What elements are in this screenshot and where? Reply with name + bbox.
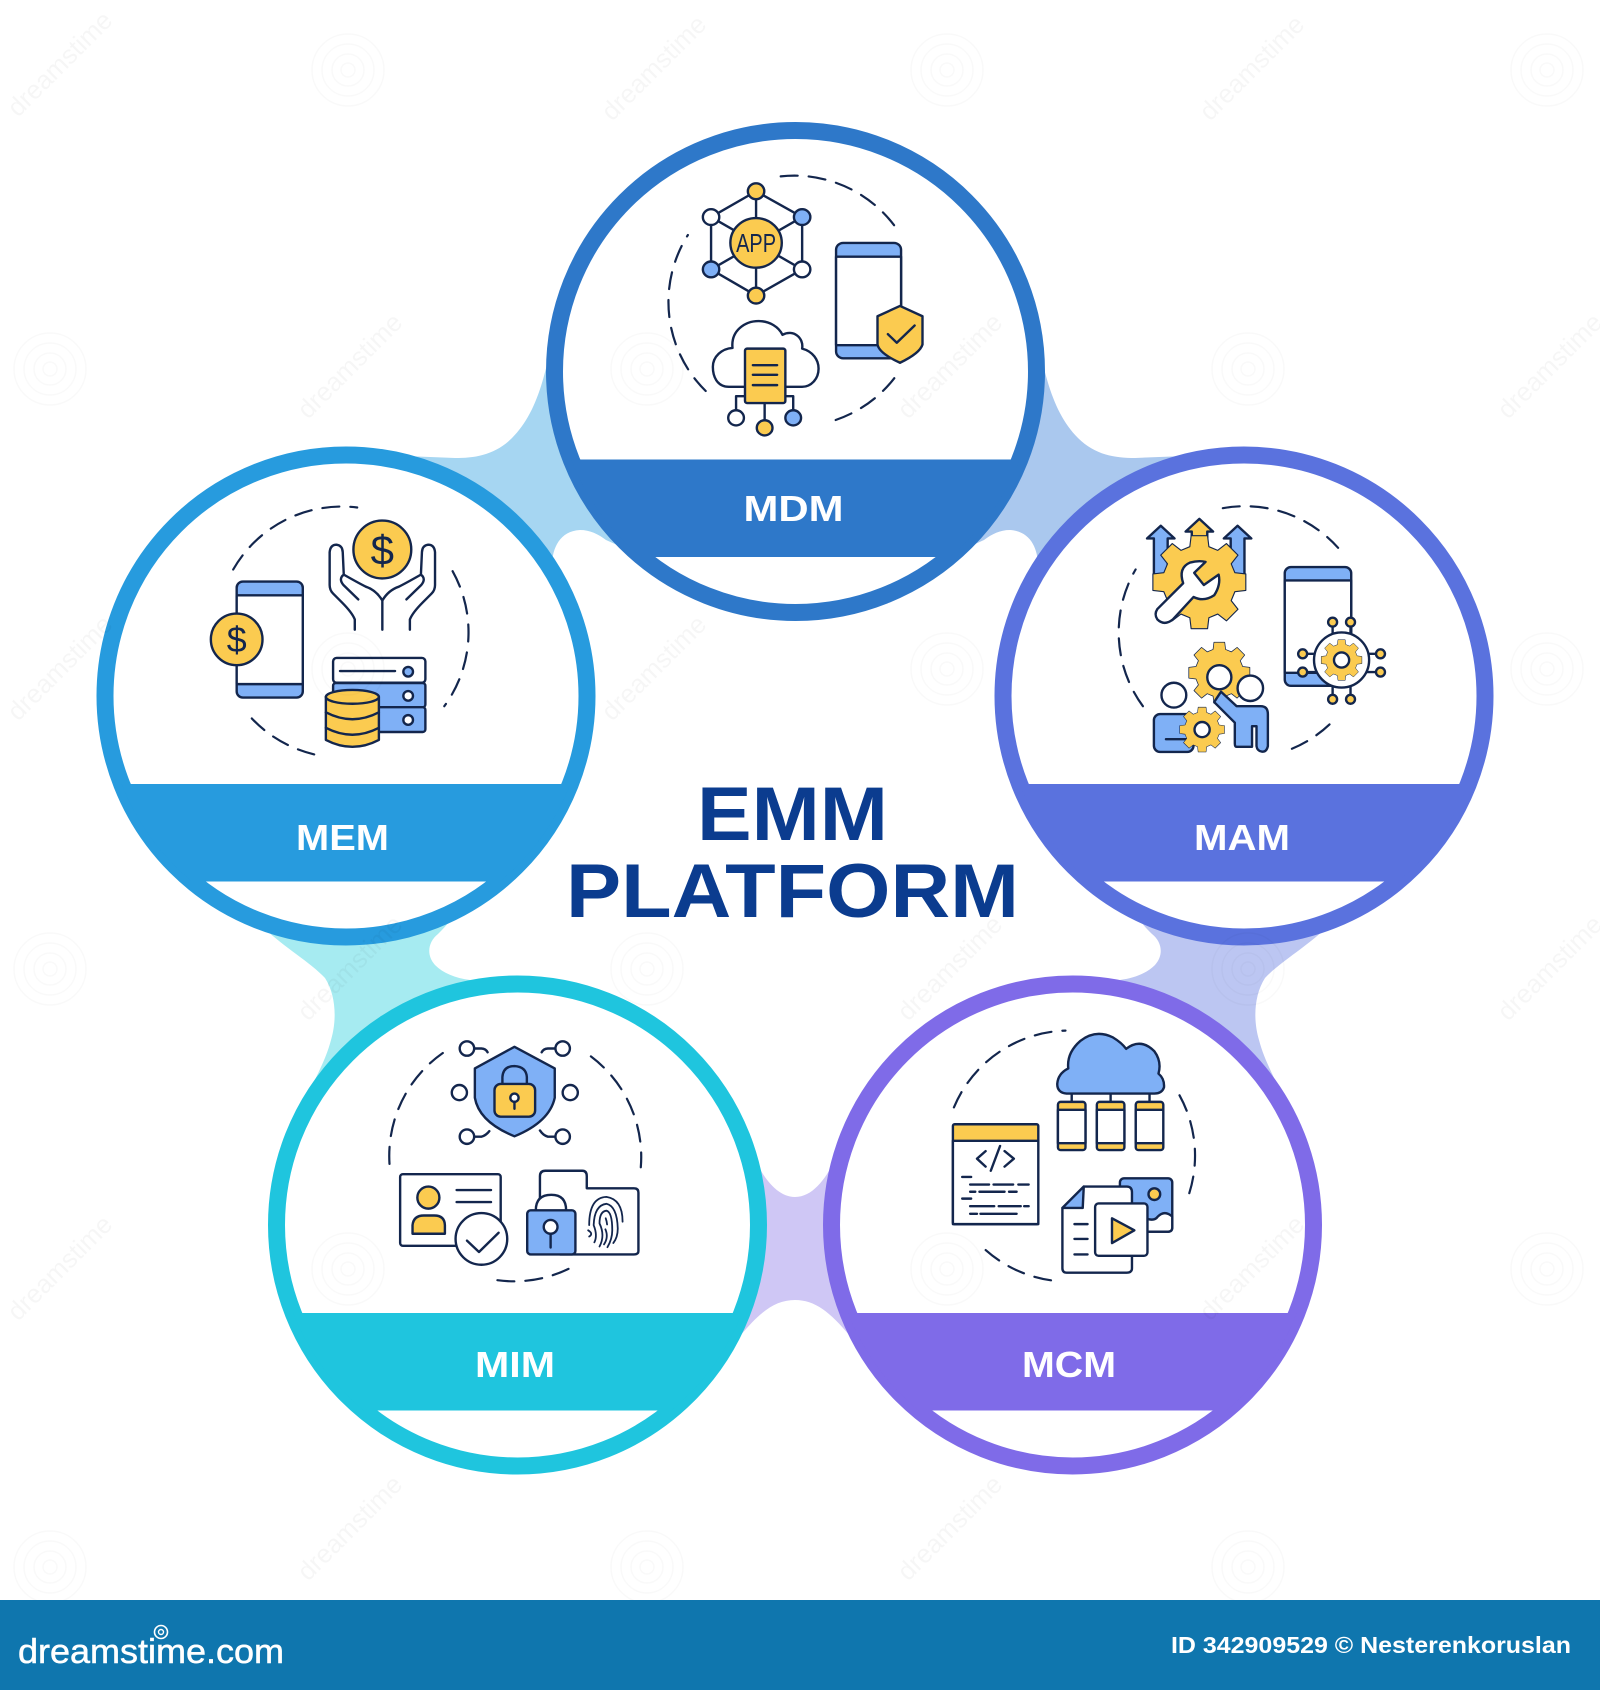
icons: MDM — [703, 183, 922, 435]
icon: cloud document — [713, 321, 819, 435]
label: MIM: MIM — [475, 1344, 555, 1385]
icon: ID card with check — [400, 1174, 507, 1265]
label: MCM: MCM — [1022, 1344, 1116, 1385]
circle ring: MIM — [276, 984, 758, 1466]
icons: MIM — [400, 1041, 638, 1265]
title — [566, 772, 1019, 934]
label band: MDM — [571, 460, 1020, 557]
icon: server with database — [326, 658, 425, 747]
circle ring: MAM — [1003, 455, 1485, 937]
watermark: dreamstime — [291, 307, 408, 424]
watermark: dreamstime — [1, 1209, 118, 1326]
dashed ring: MIM — [389, 1053, 641, 1281]
watermark: dreamstime — [1193, 9, 1310, 126]
icon: media files — [1062, 1178, 1172, 1273]
panel: MDM — [554, 130, 1036, 612]
icon: phone with circuit gear — [1285, 567, 1385, 704]
connector: MEM to MIM — [264, 860, 470, 1120]
watermark: dreamstime — [1193, 1209, 1310, 1326]
circle ring: MDM — [554, 130, 1036, 612]
icon: people with gears — [1154, 642, 1268, 752]
connector: MDM to MAM — [940, 360, 1185, 620]
watermark: dreamstime — [891, 1469, 1008, 1586]
footer logo: dreamstime.com — [18, 1633, 284, 1671]
icon: hands with coin — [330, 521, 435, 630]
icon: gear with wrench and arrows — [1147, 519, 1251, 629]
label band: MIM — [293, 1313, 742, 1410]
icon: cloud with phones — [1057, 1034, 1164, 1150]
icon: app network: APP — [736, 231, 776, 258]
watermark: dreamstime — [595, 9, 712, 126]
label band: MAM — [1020, 784, 1468, 882]
panel: MAM — [1003, 455, 1485, 937]
panel: MEM — [105, 455, 587, 937]
icon: phone with coin: $ — [227, 620, 247, 660]
dashed ring: MAM — [1119, 506, 1338, 751]
watermark: dreamstime — [291, 909, 408, 1026]
icons: MCM — [953, 1034, 1172, 1273]
watermark: dreamstime — [595, 609, 712, 726]
label: MDM: MDM — [744, 488, 844, 529]
label: MAM: MAM — [1194, 817, 1290, 858]
icon: shield with lock — [452, 1041, 578, 1144]
label band: MEM — [122, 784, 570, 882]
icons: MAM — [1147, 519, 1385, 752]
panel: MIM — [276, 984, 758, 1466]
icon: hands with coin: $ — [371, 526, 394, 573]
icon: folder with lock and fingerprint — [527, 1171, 638, 1254]
icon: app network — [703, 183, 810, 304]
dashed ring: MCM — [954, 1031, 1195, 1280]
dashed ring: MEM — [233, 507, 469, 754]
label: MEM: MEM — [296, 817, 389, 858]
panel: MCM — [832, 984, 1314, 1466]
label band: MCM — [848, 1313, 1297, 1410]
watermark: dreamstime — [1, 5, 118, 122]
connector: MAM to MCM — [1120, 860, 1326, 1120]
footer credit: ID 342909529 © Nesterenkoruslan — [1171, 1632, 1571, 1658]
watermark: dreamstime — [291, 1469, 408, 1586]
title: PLATFORM — [566, 849, 1019, 934]
circle ring: MEM — [105, 455, 587, 937]
watermark: dreamstime — [1, 609, 118, 726]
dashed ring: MDM — [668, 176, 896, 423]
connector: MDM to MEM — [405, 360, 650, 620]
icons: MEM — [211, 521, 435, 747]
footer bar — [0, 1600, 1600, 1690]
title: EMM — [697, 772, 888, 857]
circle ring: MCM — [832, 984, 1314, 1466]
connector: MIM to MCM — [730, 1160, 860, 1336]
watermark: dreamstime — [891, 909, 1008, 1026]
watermark: dreamstime — [891, 307, 1008, 424]
icon: phone with coin — [211, 582, 303, 698]
icon: code window — [953, 1124, 1038, 1224]
icon: phone with shield — [836, 243, 922, 363]
